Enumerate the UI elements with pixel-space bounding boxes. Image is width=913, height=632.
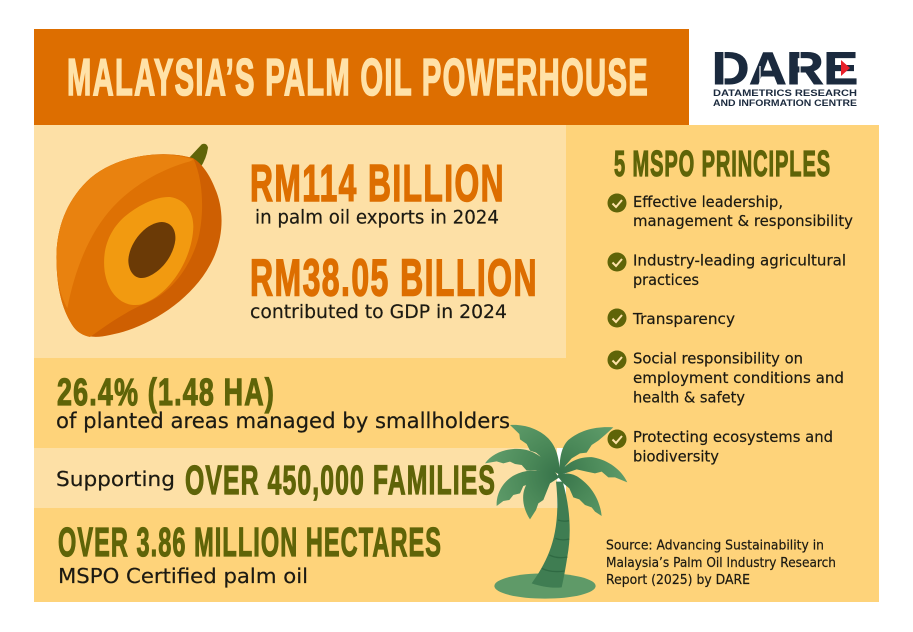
icon: palm fruit — [56, 144, 222, 337]
source note — [606, 538, 836, 588]
source note: Source: Advancing Sustainability in — [606, 538, 824, 554]
principle 2 — [608, 252, 846, 289]
stat: exports value: RM114 BILLION — [250, 155, 505, 213]
stat: GDP label: contributed to GDP in 2024 — [250, 301, 507, 323]
panel: certified hectares background — [34, 508, 566, 602]
list: principles — [608, 193, 853, 466]
panel: families band background — [34, 448, 557, 508]
panel: export and GDP background — [34, 125, 566, 358]
stat: GDP value: RM38.05 BILLION — [250, 250, 538, 308]
stat: smallholders label: of planted areas managed by smallholders — [56, 409, 510, 434]
principle 4 — [608, 350, 844, 406]
principle 5 — [608, 428, 833, 466]
icon: palm tree — [485, 425, 627, 599]
principle 4: Social responsibility on — [633, 350, 803, 368]
logo: DARE: DARE — [712, 43, 858, 94]
principle 5: Protecting ecosystems and — [633, 428, 833, 446]
principle 1 — [608, 193, 853, 230]
stat: smallholders value: 26.4% (1.48 HA) — [57, 372, 275, 414]
title banner — [34, 29, 689, 125]
principle 4: health & safety — [633, 388, 745, 406]
panel: right column background — [566, 125, 879, 602]
principle 2: practices — [633, 271, 699, 289]
principle 3: Transparency — [632, 310, 735, 328]
logo: DARE — [712, 43, 858, 108]
stat: families value: OVER 450,000 FAMILIES — [185, 457, 496, 503]
source note: Malaysia’s Palm Oil Industry Research — [606, 555, 836, 571]
principle 4: employment conditions and — [633, 369, 844, 387]
principle 1: management & responsibility — [633, 212, 853, 230]
stat: hectares label: MSPO Certified palm oil — [58, 564, 308, 588]
source note: Report (2025) by DARE — [606, 572, 750, 588]
principle 2: Industry-leading agricultural — [633, 252, 846, 270]
principle 1: Effective leadership, — [633, 193, 783, 211]
panel: smallholders background — [34, 358, 566, 448]
logo: DARE: AND INFORMATION CENTRE — [713, 98, 857, 108]
stat: hectares value: OVER 3.86 MILLION HECTARES — [58, 519, 442, 565]
stat: families label: Supporting — [56, 467, 175, 491]
principle 5: biodiversity — [633, 448, 719, 466]
logo: DARE: DATAMETRICS RESEARCH — [713, 88, 857, 98]
stat: exports label: in palm oil exports in 2024 — [255, 208, 499, 228]
